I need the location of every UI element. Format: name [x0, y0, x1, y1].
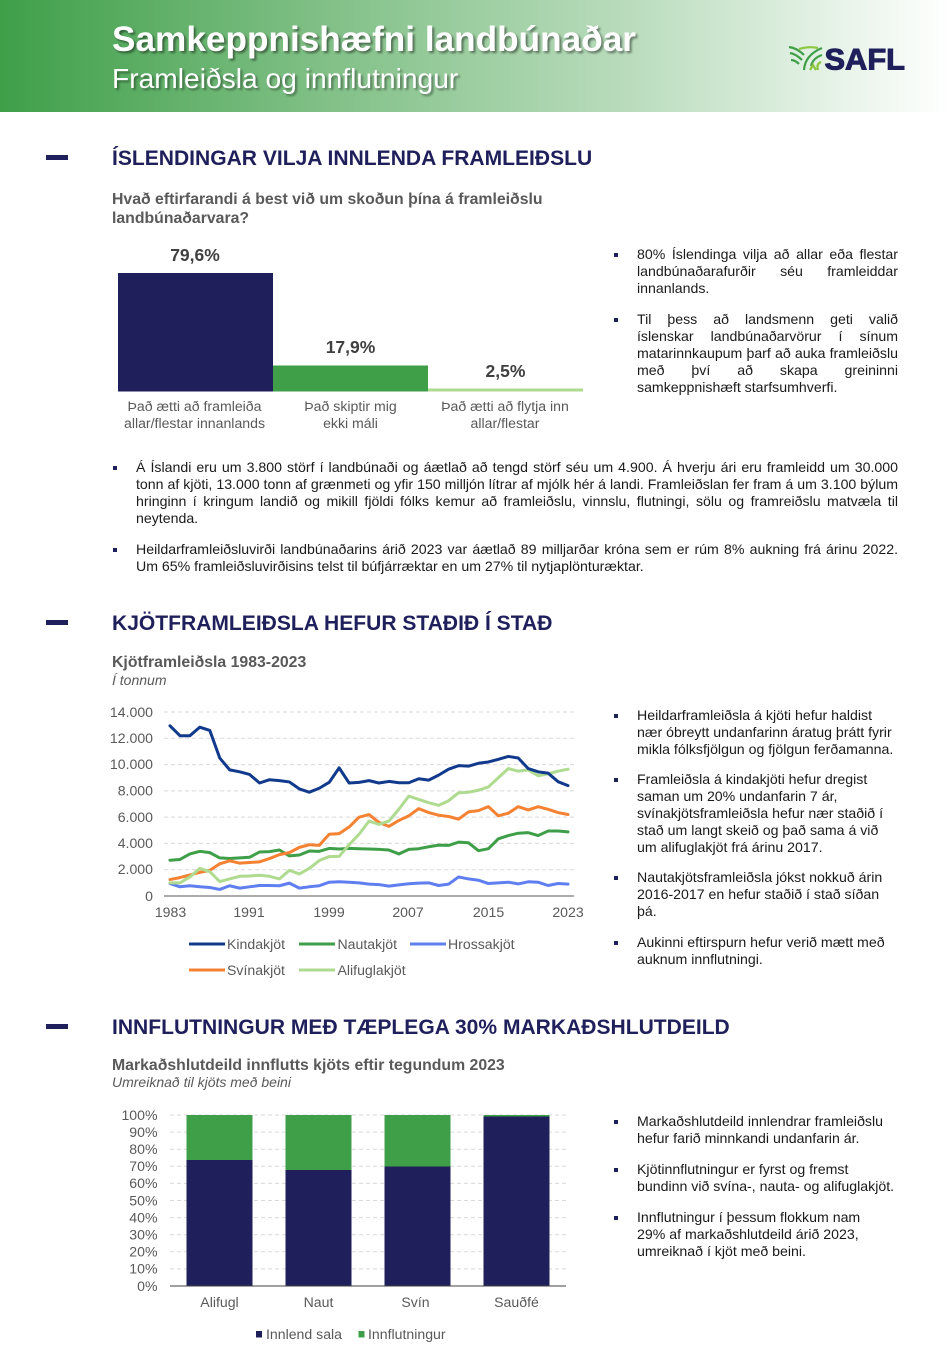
category labels: allar/flestar innanlands — [124, 415, 265, 431]
bar: Naut — [286, 1115, 352, 1286]
bullet: eftirspurn: Aukinni eftirspurn hefur verið mætt með — [637, 934, 885, 950]
bullet: innflutningur 29%: 29% af markaðshlutdeild árið 2023, — [637, 1226, 859, 1242]
bullet: heildarframleiðsluvirði: Heildarframleiðsluvirði landbúnaðarins árið 2023 var áætlað 89 milljarðar króna sem er rúm 8% aukning frá árinu 2022. — [136, 541, 898, 557]
stacked bar chart: market share — [121, 1107, 566, 1342]
bullet: eftirspurn: auknum innflutningi. — [637, 951, 763, 967]
bullet: markaðshlutdeild: Markaðshlutdeild innlendrar framleiðslu — [637, 1113, 883, 1129]
bullet: nautakjöt: 2016-2017 en hefur staðið í stað síðan — [637, 886, 879, 902]
y axis labels: 4.000 — [118, 835, 153, 851]
legend: Innflutningur — [368, 1326, 446, 1342]
y axis labels: 10% — [129, 1260, 158, 1276]
category labels: Það skiptir mig — [304, 398, 397, 414]
bullet: heildarframleiðsluvirði — [136, 541, 898, 575]
y axis labels — [110, 704, 153, 904]
bar: framleiða innanlands — [118, 245, 273, 392]
bullet: störf í landbúnaði: hringinn í kringum landið og mikill fjöldi fólks kemur að framleiðslu, vinnslu, flutningi, sölu og framreiðslu matvæla til — [136, 493, 898, 509]
line: Alifuglakjöt — [170, 769, 568, 883]
section marker — [46, 620, 68, 625]
bullet: samkeppnishæft starfsumhverfi: Til þess að landsmenn geti valið — [637, 311, 898, 327]
x axis labels — [155, 904, 584, 920]
section marker — [46, 1024, 68, 1029]
bullet: kindakjöt: Framleiðsla á kindakjöti hefur dregist — [637, 771, 867, 787]
line: Svínakjöt — [170, 807, 568, 880]
category labels: ekki máli — [323, 415, 378, 431]
chart title: Kjötframleiðsla 1983-2023 — [112, 654, 306, 671]
legend: Alifuglakjöt — [338, 962, 406, 978]
bullet: markaðshlutdeild: hefur farið minnkandi undanfarin ár. — [637, 1130, 859, 1146]
bullet: nautakjöt — [637, 869, 898, 920]
heading: section 3: INNFLUTNINGUR MEÐ TÆPLEGA 30% MARKAÐSHLUTDEILD — [112, 1016, 730, 1039]
subtitle: Framleiðsla og innflutningur — [112, 62, 458, 94]
x axis labels: 2023 — [552, 904, 584, 920]
x axis labels: 1991 — [233, 904, 265, 920]
bar: flytja inn: 2,5% — [486, 361, 526, 381]
y axis labels: 30% — [129, 1226, 158, 1242]
heading: section 2: KJÖTFRAMLEIÐSLA HEFUR STAÐIÐ Í STAÐ — [112, 612, 552, 635]
bullet: 80% Íslendinga: 80% Íslendinga vilja að allar eða flestar — [637, 246, 898, 262]
header banner — [0, 0, 950, 112]
icon: SAFL logo: SAFL — [824, 44, 905, 76]
bullet: innflutningur 29% — [637, 1209, 898, 1260]
bullet: innflutningur 29%: Innflutningur í þessum flokkum nam — [637, 1209, 860, 1225]
line: Kindakjöt — [170, 726, 568, 792]
y axis labels: 0% — [137, 1278, 158, 1294]
bullet: störf í landbúnaði — [136, 459, 898, 527]
bullet: störf í landbúnaði: Á Íslandi eru um 3.800 störf í landbúnaði og áætlað að tengd störf séu um 4.900. Á hverju ári eru framleidd um 30.000 — [136, 459, 898, 475]
bullet: samkeppnishæft starfsumhverfi: samkeppnishæft starfsumhverfi. — [637, 379, 837, 395]
heading: section 1: ÍSLENDINGAR VILJA INNLENDA FRAMLEIÐSLU — [112, 147, 592, 170]
legend: Nautakjöt — [338, 936, 397, 952]
bullet: heildarframleiðsluvirði: Um 65% framleiðsluvirðisins telst til búfjárræktar en um 27% til nytjaplönturæktar. — [136, 558, 644, 574]
bullet: 80% Íslendinga: landbúnaðarafurðir séu framleiddar — [637, 263, 898, 279]
x axis labels: Naut — [304, 1294, 333, 1310]
y axis labels: 2.000 — [118, 861, 153, 877]
bar: Svín — [384, 1115, 450, 1286]
bullet: kindakjöt: um alifuglakjöt frá árinu 2017. — [637, 839, 823, 855]
bullet: kindakjöt — [637, 771, 898, 856]
bar: skiptir ekki máli — [273, 337, 428, 392]
y axis labels: 70% — [129, 1158, 158, 1174]
bar: skiptir ekki máli: 17,9% — [326, 337, 376, 357]
chart subtitle: Í tonnum — [112, 672, 166, 688]
bullet: heildarframleiðsla: Heildarframleiðsla á kjöti hefur haldist — [637, 707, 872, 723]
line: Hrossakjöt — [170, 877, 568, 889]
y axis labels: 10.000 — [110, 756, 153, 772]
y axis labels: 6.000 — [118, 809, 153, 825]
bullet: heildarframleiðsla: nær óbreytt undanfarinn áratug þrátt fyrir — [637, 724, 892, 740]
category labels: Það ætti að flytja inn — [441, 398, 569, 414]
title: Samkeppnishæfni landbúnaðar — [112, 20, 636, 59]
bullet: kjötinnflutningur: Kjötinnflutningur er fyrst og fremst — [637, 1161, 848, 1177]
legend: Innlend sala — [266, 1326, 342, 1342]
survey question: Hvað eftirfarandi á best við um skoðun þína á framleiðslu landbúnaðarvara? — [112, 191, 543, 226]
bullet: samkeppnishæft starfsumhverfi — [637, 311, 898, 396]
y axis labels: 14.000 — [110, 704, 153, 720]
y axis labels: 20% — [129, 1244, 158, 1260]
y axis labels: 90% — [129, 1124, 158, 1140]
icon: SAFL logo — [788, 44, 905, 76]
x axis labels — [200, 1294, 539, 1310]
bullet: kindakjöt: stað um langt skeið og það sama á við — [637, 822, 878, 838]
data lines — [170, 726, 568, 889]
bullet: kjötinnflutningur: bundinn við svína-, nauta- og alifuglakjöt. — [637, 1178, 894, 1194]
x axis labels: 2015 — [473, 904, 504, 920]
chart subtitle: Umreiknað til kjöts með beini — [112, 1074, 291, 1090]
bullet: heildarframleiðsla — [637, 707, 898, 758]
legend: Hrossakjöt — [448, 936, 515, 952]
x axis labels: Alifugl — [200, 1294, 239, 1310]
bullet: nautakjöt: Nautakjötsframleiðsla jókst nokkuð árin — [637, 869, 882, 885]
y axis labels — [121, 1107, 158, 1294]
bullet: samkeppnishæft starfsumhverfi: matarinnkaupum þarf að auka framleiðslu — [637, 345, 898, 361]
x axis labels: Sauðfé — [494, 1294, 539, 1310]
legend: Kindakjöt — [227, 936, 285, 952]
y axis labels: 0 — [145, 888, 153, 904]
bullet: störf í landbúnaði: neytenda. — [136, 510, 198, 526]
line chart: meat production — [110, 704, 584, 978]
y axis labels: 60% — [129, 1175, 158, 1191]
bullet: samkeppnishæft starfsumhverfi: með því að skapa greininni — [637, 362, 898, 378]
x axis labels: 1999 — [313, 904, 345, 920]
y axis labels: 40% — [129, 1210, 158, 1226]
bar: Sauðfé — [484, 1115, 550, 1286]
bullet: nautakjöt: þá. — [637, 903, 657, 919]
category labels: allar/flestar — [471, 415, 540, 431]
bullet: kindakjöt: svínakjötsframleiðsla hefur nær staðið í — [637, 805, 883, 821]
bar: flytja inn — [428, 361, 583, 392]
legend — [189, 936, 515, 978]
x axis labels: Svín — [401, 1294, 430, 1310]
legend — [256, 1326, 446, 1342]
section marker — [46, 155, 68, 160]
bullet: innflutningur 29%: umreiknað í kjöt með beini. — [637, 1243, 806, 1259]
bar chart: survey — [118, 245, 583, 431]
bullet: samkeppnishæft starfsumhverfi: íslenskar landbúnaðarvörur í sínum — [637, 328, 898, 344]
y axis labels: 12.000 — [110, 730, 153, 746]
bullet: 80% Íslendinga: innanlands. — [637, 280, 709, 296]
chart title: Markaðshlutdeild innflutts kjöts eftir tegundum 2023 — [112, 1057, 505, 1074]
category labels — [124, 398, 569, 431]
bullet: markaðshlutdeild — [637, 1113, 898, 1147]
bar: framleiða innanlands: 79,6% — [170, 245, 220, 265]
bullet: 80% Íslendinga — [637, 246, 898, 297]
x axis labels: 2007 — [392, 904, 424, 920]
y axis labels: 50% — [129, 1192, 158, 1208]
bullet: eftirspurn — [637, 934, 898, 968]
x axis labels: 1983 — [155, 904, 186, 920]
y axis labels: 80% — [129, 1141, 158, 1157]
category labels: Það ætti að framleiða — [128, 398, 262, 414]
bullet: heildarframleiðsla: mikla fólksfjölgun og fjölgun ferðamanna. — [637, 741, 893, 757]
line: Nautakjöt — [170, 831, 568, 860]
bullet: kjötinnflutningur — [637, 1161, 898, 1195]
legend: Svínakjöt — [227, 962, 285, 978]
bullet: störf í landbúnaði: tonn af kjöti, 13.000 tonn af grænmeti og yfir 150 milljón lítrar af mjólk hér á landi. Framleiðslan fer fram á um 3.100 býlum — [136, 476, 898, 492]
y axis labels: 100% — [121, 1107, 158, 1123]
bullet: kindakjöt: saman um 20% undanfarin 7 ár, — [637, 788, 837, 804]
y axis labels: 8.000 — [118, 782, 153, 798]
bar: Alifugl — [186, 1115, 252, 1286]
